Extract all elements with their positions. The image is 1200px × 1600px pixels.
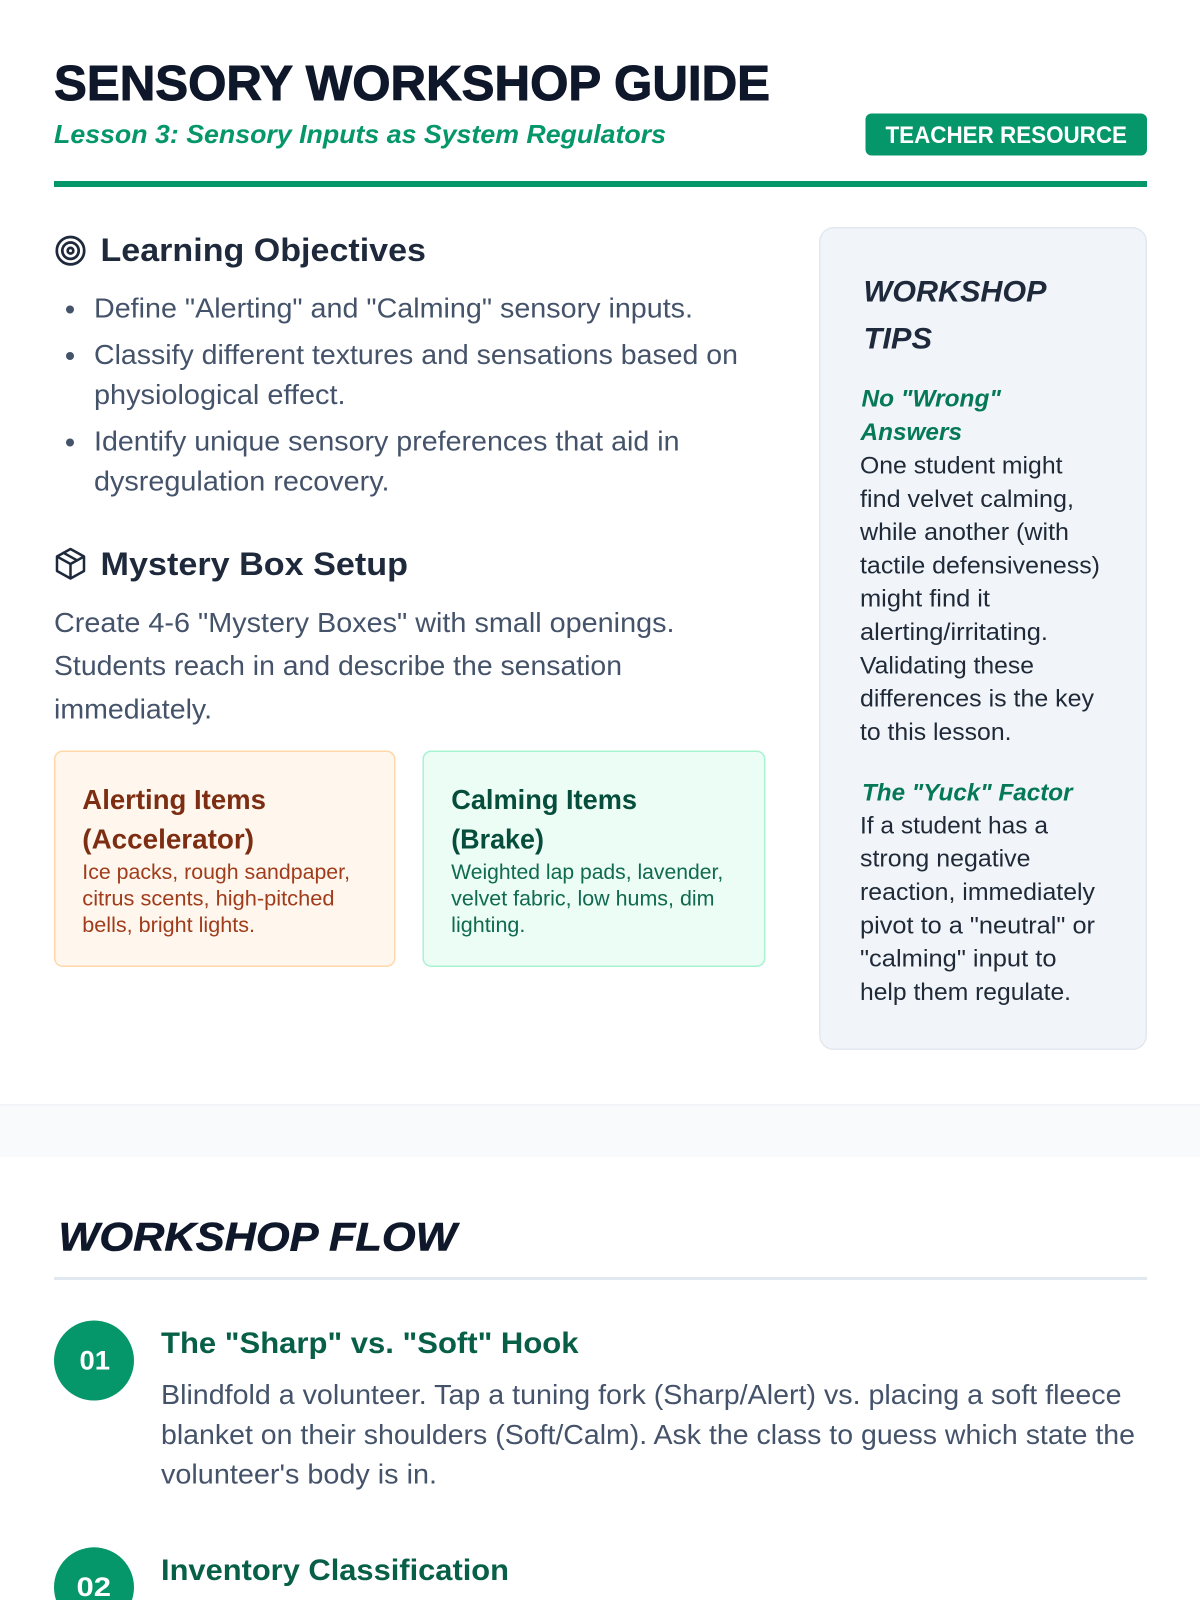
- tip: the yuck factor: [860, 779, 1096, 1006]
- tip: no wrong answers: might find it: [860, 586, 990, 613]
- tip: no wrong answers: No "Wrong": [862, 386, 1001, 413]
- objectives list: Define "Alerting" and "Calming" sensory inputs.: [94, 292, 693, 323]
- card: alerting items: [55, 751, 395, 966]
- card: alerting items: (Accelerator): [82, 824, 254, 855]
- objectives list: [66, 292, 738, 497]
- tip: no wrong answers: One student might: [860, 452, 1063, 479]
- step 02 heading: Inventory Classification: [161, 1554, 509, 1587]
- tip: no wrong answers: find velvet calming,: [860, 486, 1074, 513]
- heading: workshop flow: WORKSHOP FLOW: [58, 1216, 460, 1260]
- card: calming items: Calming Items: [451, 784, 637, 815]
- setup description: Create 4-6 "Mystery Boxes" with small openings.: [54, 607, 674, 638]
- tip: the yuck factor: help them regulate.: [860, 979, 1071, 1006]
- card: alerting items: Alerting Items: [82, 784, 266, 815]
- heading: learning objectives: Learning Objectives: [100, 232, 426, 268]
- tip: the yuck factor: "calming" input to: [860, 946, 1056, 973]
- tip: the yuck factor: strong negative: [860, 846, 1030, 873]
- card: calming items: [423, 751, 765, 966]
- objectives list: Classify different textures and sensations based on: [94, 339, 738, 370]
- tip: no wrong answers: Answers: [860, 419, 962, 446]
- heading: workshop tips: [864, 276, 1048, 355]
- objectives list: Identify unique sensory preferences that aid in: [94, 426, 680, 457]
- tip: the yuck factor: reaction, immediately: [860, 879, 1096, 906]
- step 01 description: volunteer's body is in.: [161, 1458, 437, 1490]
- setup description: immediately.: [54, 694, 212, 724]
- step 01: [54, 1320, 1135, 1490]
- icon: package box: [57, 549, 84, 578]
- heading: workshop tips: WORKSHOP: [864, 276, 1048, 309]
- setup description: Students reach in and describe the sensation: [54, 650, 622, 681]
- header: [54, 56, 1147, 187]
- step 02: [54, 1547, 509, 1600]
- step 01 description: [161, 1379, 1135, 1490]
- card: alerting items: Ice packs, rough sandpaper,: [82, 861, 350, 884]
- card: alerting items: bells, bright lights.: [82, 914, 255, 937]
- tip: no wrong answers: to this lesson.: [860, 719, 1012, 746]
- heading: mystery box setup: Mystery Box Setup: [100, 546, 408, 582]
- card: calming items: lighting.: [451, 914, 525, 937]
- tip: the yuck factor: pivot to a "neutral" or: [860, 912, 1095, 939]
- tip: no wrong answers: while another (with: [859, 519, 1069, 546]
- card: alerting items: citrus scents, high-pitched: [82, 887, 334, 910]
- tip: no wrong answers: alerting/irritating.: [860, 619, 1048, 646]
- step 01 description: blanket on their shoulders (Soft/Calm). Ask the class to guess which state the: [161, 1419, 1135, 1450]
- step 01 description: Blindfold a volunteer. Tap a tuning fork (Sharp/Alert) vs. placing a soft fleece: [161, 1379, 1122, 1410]
- objectives list: dysregulation recovery.: [94, 466, 390, 497]
- step number 01: 01: [80, 1345, 110, 1375]
- tip: no wrong answers: differences is the key: [860, 686, 1095, 713]
- tip: the yuck factor: The "Yuck" Factor: [862, 779, 1074, 806]
- setup description: [54, 607, 674, 724]
- panel: mystery box setup: [54, 546, 765, 966]
- card: calming items: velvet fabric, low hums, dim: [451, 887, 714, 910]
- tip: the yuck factor: If a student has a: [860, 812, 1048, 839]
- step number 01: [54, 1320, 134, 1400]
- badge: teacher resource: TEACHER RESOURCE: [886, 122, 1127, 149]
- badge: teacher resource: [866, 114, 1147, 156]
- icon: target: [57, 237, 84, 264]
- section: workshop flow: [54, 1216, 1147, 1600]
- tip: no wrong answers: Validating these: [860, 652, 1034, 679]
- subtitle: Lesson 3: Sensory Inputs as System Regulators: [54, 119, 666, 149]
- tip: no wrong answers: [859, 386, 1100, 746]
- panel: workshop tips: [820, 228, 1146, 1049]
- card: calming items: Weighted lap pads, lavender,: [451, 861, 723, 884]
- panel: learning objectives: [57, 232, 738, 497]
- step 01 heading: The "Sharp" vs. "Soft" Hook: [161, 1327, 579, 1360]
- tip: no wrong answers: tactile defensiveness): [860, 552, 1100, 579]
- step number 02: [54, 1547, 134, 1600]
- card: calming items: (Brake): [451, 824, 544, 855]
- title: SENSORY WORKSHOP GUIDE: [54, 56, 770, 111]
- objectives list: physiological effect.: [94, 379, 346, 410]
- heading: workshop tips: TIPS: [864, 322, 932, 355]
